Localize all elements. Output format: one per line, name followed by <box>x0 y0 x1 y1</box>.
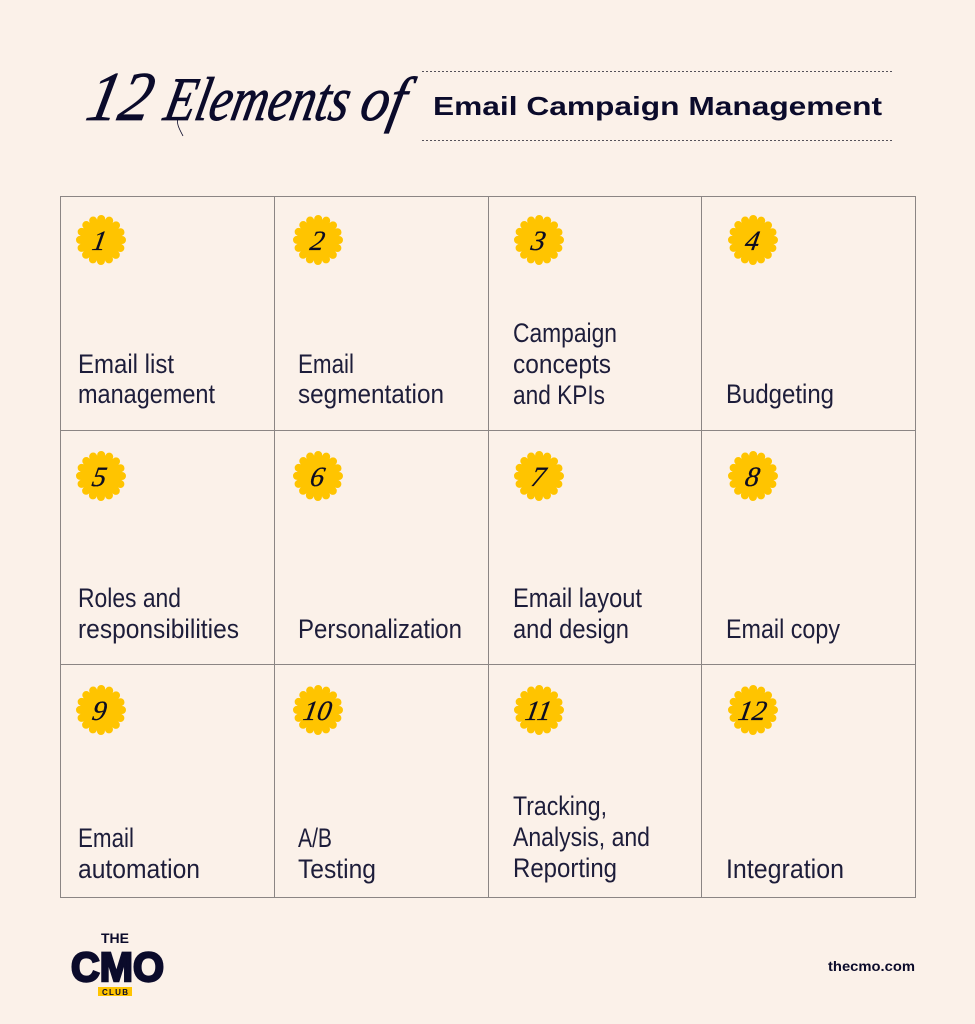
cell 2: 2 <box>308 226 327 257</box>
cell 1: Email list <box>78 349 174 379</box>
cell 5: 5 <box>90 462 109 493</box>
cell 9 <box>78 689 200 884</box>
cell 10: A/B <box>298 823 332 853</box>
cell 8 <box>726 455 840 644</box>
cell 3: and KPIs <box>513 380 605 410</box>
grid table <box>60 196 916 898</box>
cell 9: 9 <box>90 696 109 727</box>
title: script heading: 12 <box>81 59 161 136</box>
cell 4 <box>726 219 834 409</box>
website: thecmo.com <box>828 959 915 974</box>
cell 1 <box>78 219 215 409</box>
cell 6: 6 <box>308 462 327 493</box>
cell 6 <box>297 455 462 644</box>
cell 11: 11 <box>523 696 554 727</box>
cell 1: 1 <box>90 226 109 257</box>
cell 7: 7 <box>529 462 550 493</box>
cell 5: responsibilities <box>78 614 239 644</box>
logo: The CMO Club: CLUB <box>102 988 128 997</box>
title: script heading: of <box>355 65 421 134</box>
cell 8: 8 <box>743 462 762 493</box>
cell 12: Integration <box>726 854 844 884</box>
logo: The CMO Club: CMO <box>71 944 164 990</box>
cell 10: 10 <box>301 696 334 727</box>
cell 11 <box>513 689 650 883</box>
cell 1: management <box>78 379 215 409</box>
cell 3: 3 <box>528 226 548 257</box>
title: script heading <box>81 59 421 136</box>
cell 2: segmentation <box>298 379 444 409</box>
logo: The CMO Club: THE <box>101 930 129 946</box>
cell 11: Reporting <box>513 853 617 883</box>
subtitle with dotted rules: Email Campaign Management <box>433 91 882 121</box>
cell 3: Campaign <box>513 318 617 348</box>
title: script heading: Elements <box>158 65 358 134</box>
cell 12 <box>726 689 844 884</box>
swash: tail under E <box>177 118 183 136</box>
cell 9: Email <box>78 823 134 853</box>
cell 7: Email layout <box>513 583 642 613</box>
cell 11: Tracking, <box>513 791 607 821</box>
cell 8: Email copy <box>726 614 840 644</box>
cell 11: Analysis, and <box>513 822 650 852</box>
cell 7: and design <box>513 614 629 644</box>
cell 4: 4 <box>743 226 762 257</box>
cell 9: automation <box>78 854 200 884</box>
cell 6: Personalization <box>298 614 462 644</box>
cell 7 <box>513 455 642 644</box>
cell 5: Roles and <box>78 583 181 613</box>
cell 2: Email <box>298 349 354 379</box>
cell 10: Testing <box>298 854 376 884</box>
logo: The CMO Club <box>71 930 164 997</box>
cell 2 <box>297 219 444 409</box>
cell 12: 12 <box>736 696 769 727</box>
cell 3: concepts <box>513 349 611 379</box>
cell 10 <box>297 689 376 884</box>
cell 5 <box>78 455 239 644</box>
cell 3 <box>513 219 617 410</box>
cell 4: Budgeting <box>726 379 834 409</box>
